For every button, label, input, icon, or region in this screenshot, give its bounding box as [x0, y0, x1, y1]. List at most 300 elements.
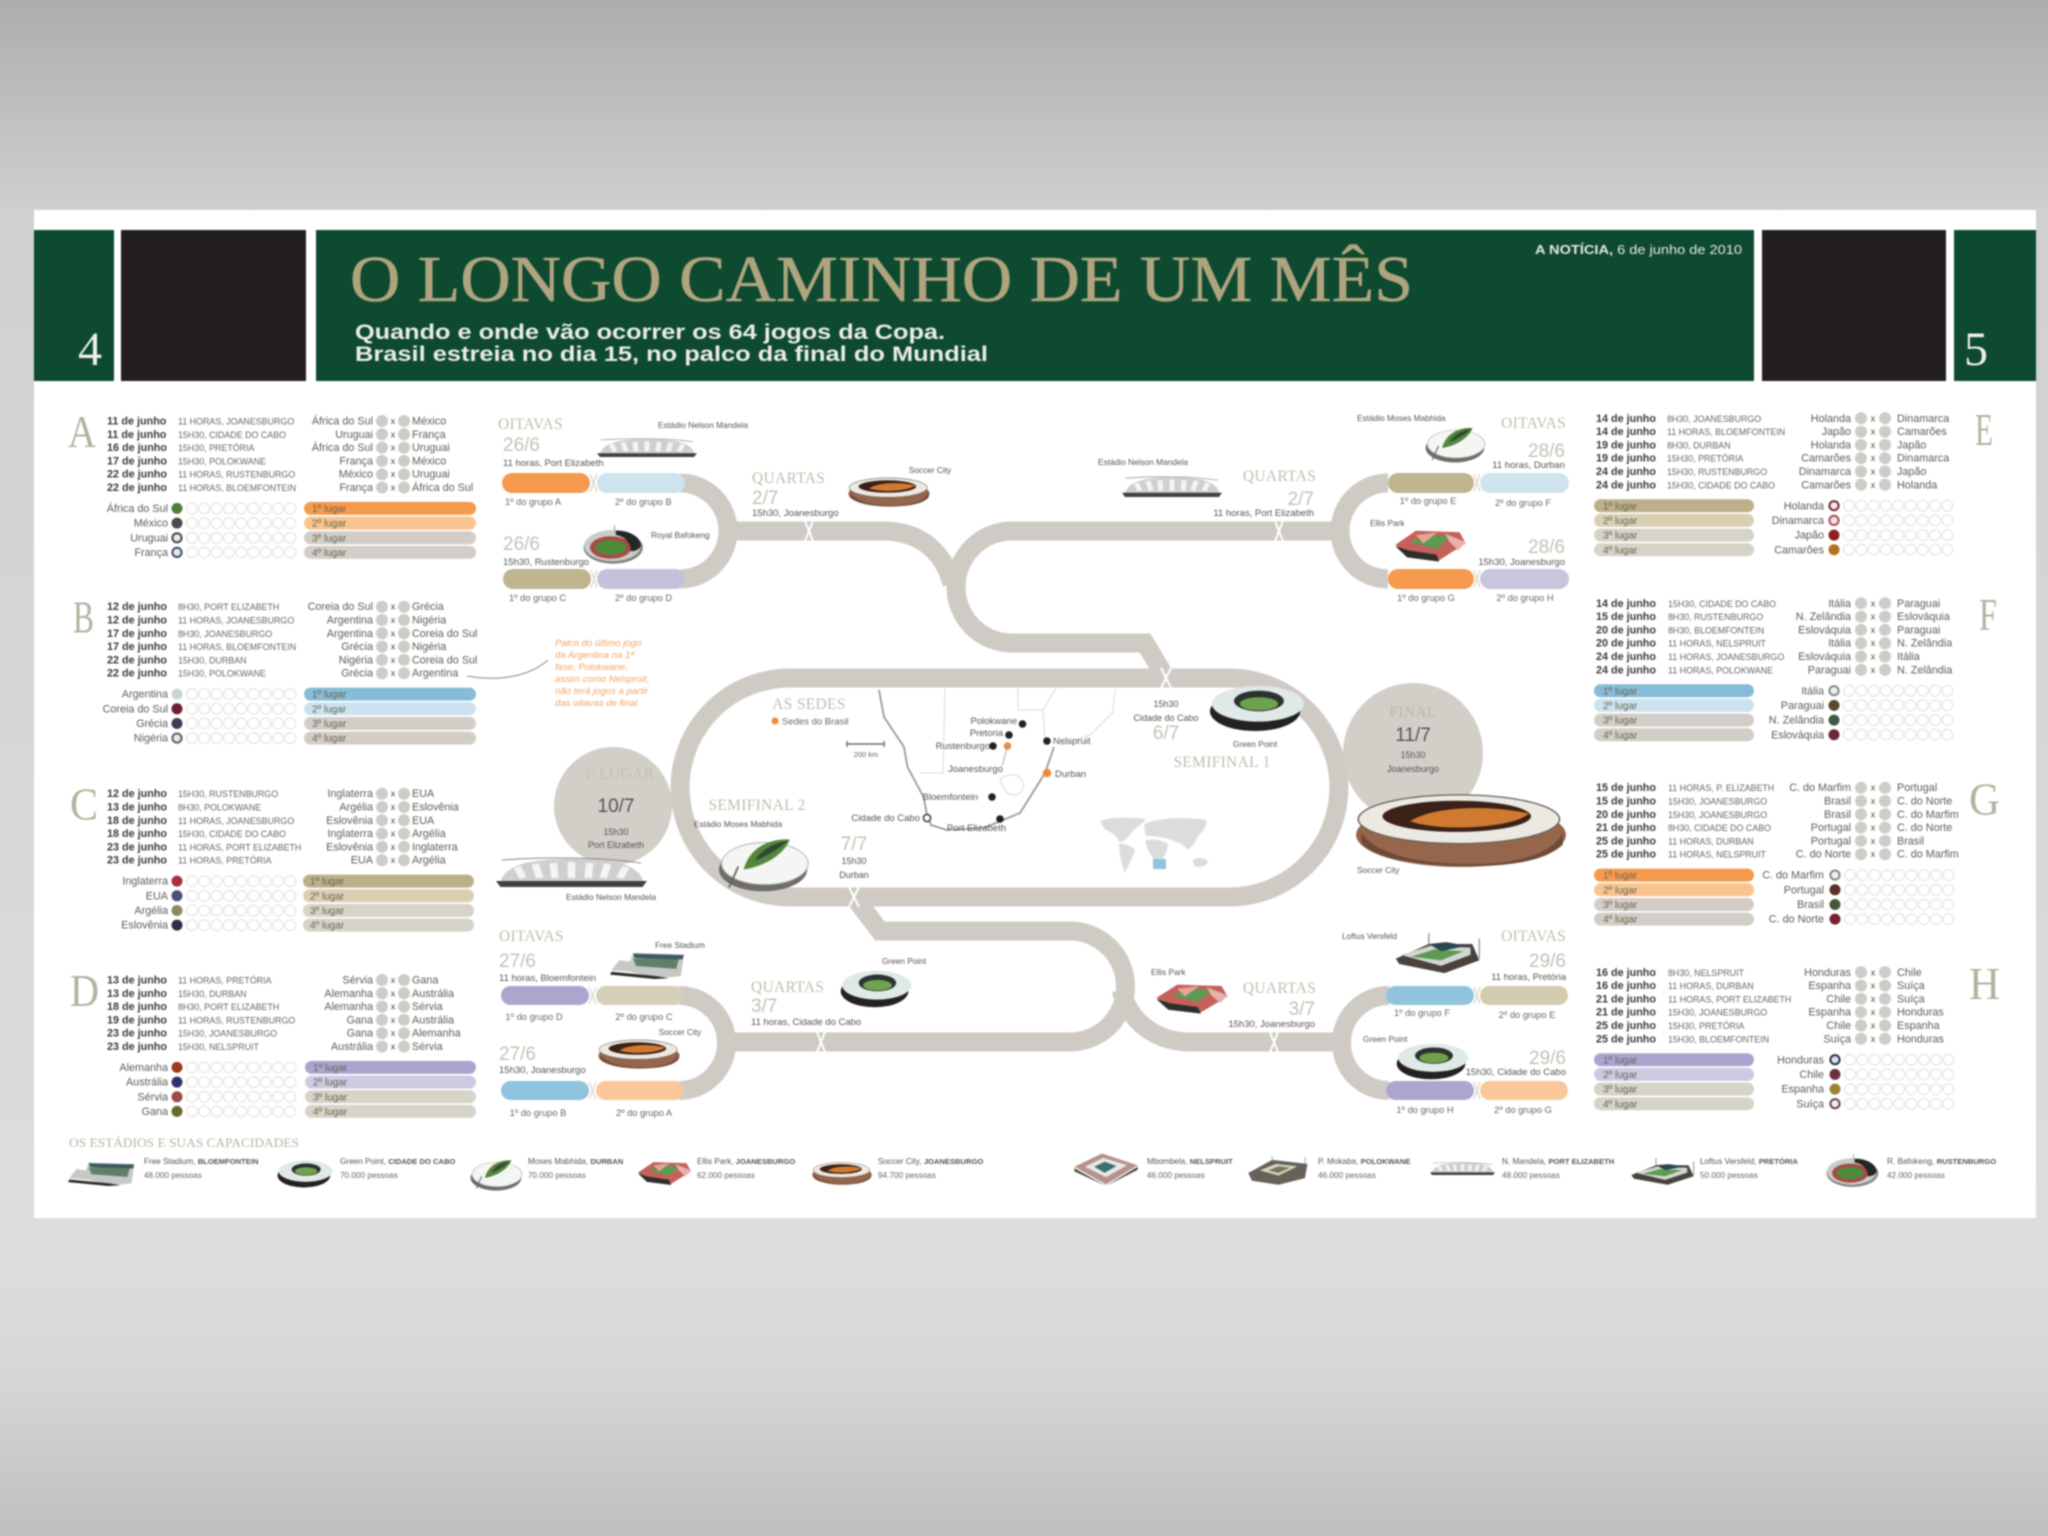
stadium: Royal Bafokeng: Royal Bafokeng: [651, 530, 710, 540]
Free Stadium: [68, 1157, 258, 1186]
fixtures B: 12 de junho: [107, 601, 167, 613]
fixtures G: C. do Norte: [1897, 796, 1952, 808]
stadium: Free State: [610, 940, 705, 979]
fixtures G: [1596, 782, 1959, 861]
fixtures H: 15H30, JOANESBURGO: [1668, 1008, 1767, 1018]
fixtures H: [1596, 966, 1944, 1045]
fixtures G: x: [1871, 836, 1876, 846]
fixtures A: África do Sul: [312, 414, 373, 428]
standings E: Japão: [1795, 530, 1824, 542]
world map: [1100, 818, 1208, 873]
callout note: [467, 638, 649, 709]
fixtures A: x: [391, 482, 396, 492]
group G: [1594, 773, 2000, 926]
fixtures G: 21 de junho: [1596, 822, 1656, 834]
fixtures A: México: [412, 416, 446, 428]
fixtures D: 15H30, NELSPRUIT: [178, 1042, 259, 1052]
match 2 info: 29/6: [1529, 1048, 1566, 1069]
quarter-final 2/7 left: QUARTAS: [752, 470, 825, 487]
quarter-final 2/7 left: [752, 465, 952, 519]
standings B: 2º lugar: [312, 704, 347, 715]
match 1 info: [499, 951, 673, 1022]
fixtures G: x: [1871, 809, 1876, 819]
fixtures H: x: [1871, 1007, 1876, 1017]
fixtures C: 15H30, RUSTENBURGO: [178, 789, 278, 799]
fixtures B: x: [391, 642, 396, 652]
fixtures H: Suíça: [1897, 993, 1925, 1005]
match 1 info: 1º do grupo F: [1394, 1008, 1450, 1018]
fixtures C: EUA: [412, 815, 435, 827]
quarter info: 15h30, Joanesburgo: [1228, 1019, 1315, 1030]
fixtures A: México: [339, 469, 373, 481]
fixtures E: 24 de junho: [1596, 479, 1656, 491]
round of 16: bottom left: [499, 928, 705, 1118]
scale bar: 200 km: [854, 750, 878, 759]
fixtures F: Paraguai: [1897, 598, 1940, 610]
fixtures E: 8H30, DURBAN: [1667, 440, 1731, 450]
fixtures A: 22 de junho: [107, 469, 167, 481]
fixtures G: 20 de junho: [1596, 809, 1656, 821]
fixtures A: 11 HORAS, JOANESBURGO: [178, 416, 294, 426]
fixtures G: 15 de junho: [1596, 796, 1656, 808]
fixtures E: Camarões: [1801, 479, 1852, 491]
stadium: Ellis Park: [1370, 518, 1466, 562]
fixtures E: x: [1871, 413, 1876, 423]
fixtures B: 22 de junho: [107, 654, 167, 666]
fixtures H: 21 de junho: [1596, 993, 1656, 1005]
fixtures F: 11 HORAS, NELSPRUIT: [1668, 639, 1767, 649]
fixtures H: 11 HORAS, PORT ELIZABETH: [1668, 994, 1791, 1004]
fixtures E: x: [1871, 453, 1876, 463]
match 1 info: 1º do grupo D: [505, 1012, 563, 1022]
fixtures C: x: [391, 802, 396, 812]
stadium: Nelson Mandela: Estádio Nelson Mandela: [1098, 457, 1188, 467]
heading oitavas: OITAVAS: [498, 416, 563, 433]
fixtures H: x: [1871, 981, 1876, 991]
stadium: Nelson Mandela: Estádio Nelson Mandela: [658, 420, 748, 430]
fixtures C: 8H30, POLOKWANE: [178, 803, 261, 813]
semifinal 2 date: 7/7: [841, 834, 867, 855]
stadium: Nelson Mandela third place: Estádio Nelson Mandela: [566, 892, 656, 902]
standings H: Espanha: [1781, 1084, 1824, 1096]
stadium: Ellis Park: Ellis Park: [1151, 967, 1186, 977]
Free Stadium: 48.000 pessoas: [144, 1171, 202, 1180]
standings A: 4º lugar: [312, 548, 347, 559]
fixtures F: x: [1871, 651, 1876, 661]
P. Mokaba: P. Mokaba, POLOKWANE: [1318, 1157, 1410, 1166]
fixtures B: Nigéria: [412, 615, 446, 627]
fixtures G: C. do Marfim: [1897, 809, 1959, 821]
stadium: Green Point: Green Point: [882, 956, 927, 966]
stadium: Moses Mabhida: Estádio Moses Mabhida: [1357, 413, 1446, 423]
cities: Polokwane: [971, 716, 1017, 727]
standings D: Alemanha: [119, 1062, 168, 1074]
fixtures G: C. do Marfim: [1789, 782, 1851, 794]
fixtures G: C. do Norte: [1796, 849, 1851, 861]
stadium: Nelson Mandela: [597, 420, 748, 457]
fixtures G: C. do Marfim: [1897, 849, 1959, 861]
N. Mandela: N. Mandela, PORT ELIZABETH: [1502, 1157, 1614, 1166]
fixtures D: 13 de junho: [107, 974, 167, 986]
letter E: E: [1975, 404, 1993, 455]
fixtures D: 19 de junho: [107, 1014, 167, 1026]
fixtures D: 11 HORAS, RUSTENBURGO: [178, 1015, 295, 1025]
fixtures A: x: [391, 429, 396, 439]
semifinal 1 date: 6/7: [1153, 723, 1179, 744]
round of 16: top right: [1357, 413, 1569, 603]
quarter info: 11 horas, Port Elizabeth: [1213, 508, 1314, 519]
fixtures H: Honduras: [1897, 1033, 1944, 1045]
standings E: 4º lugar: [1603, 545, 1638, 556]
fixtures F: 15 de junho: [1596, 611, 1656, 623]
fixtures G: 15H30, JOANESBURGO: [1668, 797, 1767, 807]
coastline: [879, 690, 1054, 830]
stadium: Loftus Versfeld: Loftus Versfeld: [1342, 931, 1397, 941]
callout text: das oitavas de final: [555, 698, 638, 709]
heading oitavas: OITAVAS: [1501, 415, 1566, 432]
fixtures G: 25 de junho: [1596, 849, 1656, 861]
fixtures D: x: [391, 1015, 396, 1025]
quarter info: 3/7: [751, 996, 777, 1017]
South Africa marker: [1153, 859, 1166, 869]
cities: Durban: [1055, 769, 1086, 780]
Moses Mabhida: Moses Mabhida, DURBAN: [528, 1157, 623, 1166]
standings F: [1594, 684, 1953, 741]
fixtures F: 20 de junho: [1596, 624, 1656, 636]
match 1 info: 2º do grupo B: [615, 497, 672, 507]
Green Point: Green Point, CIDADE DO CABO: [340, 1157, 455, 1166]
subtitle: Quando e onde vão ocorrer os 64 jogos da Copa.: [355, 321, 945, 344]
black ad block left: [121, 230, 306, 381]
page number block left: 4: [78, 323, 102, 376]
match 2 info: 15h30, Joanesburgo: [1478, 557, 1565, 568]
standings C: Argélia: [134, 905, 168, 917]
page number block right: [1954, 230, 2036, 381]
match 1 info: 1º do grupo A: [505, 497, 562, 507]
quarter info: [1228, 999, 1315, 1030]
fixtures H: 8H30, NELSPRUIT: [1668, 968, 1745, 978]
standings A: Uruguai: [130, 532, 168, 544]
fixtures F: 11 HORAS, JOANESBURGO: [1668, 652, 1784, 662]
fixtures A: 11 HORAS, BLOEMFONTEIN: [178, 483, 296, 493]
match 2 info: [499, 1044, 673, 1118]
fixtures C: Inglaterra: [412, 841, 458, 853]
stadium capacities strip: [68, 1136, 1996, 1191]
semifinal 2 date: 15h30: [841, 856, 867, 866]
fixtures F: Paraguai: [1808, 664, 1851, 676]
fixtures E: Camarões: [1801, 453, 1852, 465]
fixtures A: 17 de junho: [107, 455, 167, 467]
letter A: A: [68, 406, 96, 457]
fixtures A: França: [412, 429, 446, 441]
fixtures G: 11 HORAS, NELSPRUIT: [1668, 850, 1767, 860]
standings H: 1º lugar: [1603, 1055, 1638, 1066]
fixtures C: Eslovênia: [326, 841, 373, 853]
heading oitavas: OITAVAS: [499, 928, 564, 945]
semifinal 2 date: [839, 834, 869, 880]
map legend: Sedes do Brasil: [782, 716, 849, 728]
standings D: 2º lugar: [313, 1078, 348, 1089]
R. Bafokeng: R. Bafokeng, RUSTENBURGO: [1887, 1157, 1996, 1166]
fixtures D: Austrália: [412, 1014, 454, 1026]
match 2 info: 28/6: [1528, 537, 1565, 558]
fixtures B: 15H30, DURBAN: [178, 655, 247, 665]
match 2 info: 1º do grupo B: [510, 1108, 566, 1118]
fixtures B: Argentina: [327, 615, 373, 627]
stadium: Soccer City: [598, 1027, 702, 1069]
fixtures D: x: [391, 988, 396, 998]
heading oitavas: OITAVAS: [1501, 928, 1566, 945]
fixtures A: [107, 414, 473, 494]
standings E: [1594, 499, 1953, 556]
fixtures D: 15H30, JOANESBURGO: [178, 1029, 277, 1039]
fixtures F: Itália: [1897, 651, 1920, 663]
subtitle: [355, 321, 988, 366]
R. Bafokeng: [1827, 1154, 1996, 1187]
stadium: Loftus Versfeld: [1342, 931, 1479, 973]
match 1 info: 28/6: [1528, 441, 1565, 462]
quarter-final 3/7 right: QUARTAS: [1243, 980, 1316, 997]
fixtures D: 18 de junho: [107, 1001, 167, 1013]
standings H: [1594, 1053, 1954, 1110]
standings H: Suíça: [1796, 1098, 1824, 1110]
match 2 info: 1º do grupo C: [509, 593, 566, 603]
standings D: [119, 1061, 476, 1118]
bars top right: [1388, 473, 1569, 589]
fixtures B: 11 HORAS, BLOEMFONTEIN: [178, 642, 296, 652]
fixtures B: 15H30, POLOKWANE: [178, 669, 266, 679]
standings B: Argentina: [122, 689, 168, 701]
stadium: Soccer City: [848, 465, 952, 507]
group E: [1594, 404, 1993, 556]
Loftus Versfeld: 50.000 pessoas: [1700, 1171, 1758, 1180]
fixtures G: x: [1871, 823, 1876, 833]
semifinal 2 date: Durban: [839, 870, 869, 880]
bracket tracks: [679, 483, 1389, 1090]
fixtures F: Paraguai: [1897, 624, 1940, 636]
Mbombela: 46.000 pessoas: [1147, 1171, 1205, 1180]
standings D: Sérvia: [137, 1091, 168, 1103]
fixtures D: 13 de junho: [107, 988, 167, 1000]
fixtures H: 16 de junho: [1596, 967, 1656, 979]
P. Mokaba: 46.000 pessoas: [1318, 1171, 1376, 1180]
fixtures A: 22 de junho: [107, 482, 167, 494]
semifinal 1: [1133, 686, 1304, 771]
group B: [73, 592, 477, 745]
title: O LONGO CAMINHO DE UM MÊS: [350, 243, 1413, 316]
fixtures A: 11 de junho: [107, 429, 167, 441]
fixtures C: 23 de junho: [107, 855, 167, 867]
standings G: 3º lugar: [1603, 900, 1638, 911]
standings C: Eslovênia: [121, 920, 168, 932]
cities: Cidade do Cabo: [851, 813, 920, 824]
fixtures C: Eslovênia: [326, 815, 373, 827]
standings G: Portugal: [1784, 884, 1824, 896]
standings E: Dinamarca: [1772, 515, 1824, 527]
fixtures E: x: [1871, 427, 1876, 437]
fixtures D: 15H30, DURBAN: [178, 989, 247, 999]
fixtures B: 11 HORAS, JOANESBURGO: [178, 616, 294, 626]
fixtures B: x: [391, 655, 396, 665]
stadium: Moses Mabhida: Estádio Moses Mabhida: [694, 819, 783, 829]
strip heading: OS ESTÁDIOS E SUAS CAPACIDADES: [69, 1136, 299, 1150]
final date: 11/7: [1395, 725, 1431, 746]
stadium: Soccer City: Soccer City: [909, 465, 952, 475]
cities: [851, 716, 1091, 834]
fixtures D: 8H30, PORT ELIZABETH: [178, 1002, 279, 1012]
match 2 info: 15h30, Rustenburgo: [503, 557, 589, 568]
match 2 info: 2º do grupo D: [615, 593, 672, 603]
fixtures E: x: [1871, 466, 1876, 476]
fixtures G: x: [1871, 783, 1876, 793]
standings C: Inglaterra: [122, 876, 168, 888]
quarter info: [1213, 489, 1314, 519]
fixtures G: 11 HORAS, P. ELIZABETH: [1668, 783, 1774, 793]
fixtures A: 15H30, CIDADE DO CABO: [178, 430, 286, 440]
fixtures C: EUA: [351, 855, 374, 867]
standings C: EUA: [146, 890, 169, 902]
fixtures C: 23 de junho: [107, 841, 167, 853]
final venue: [1387, 750, 1439, 774]
fixtures E: Dinamarca: [1799, 466, 1851, 478]
fixtures C: 11 HORAS, PORT ELIZABETH: [178, 842, 301, 852]
fixtures H: x: [1871, 994, 1876, 1004]
stadium: Moses Mabhida: [694, 819, 808, 891]
callout text: Palco do último jogo: [555, 638, 642, 649]
match 2 info: 2º do grupo A: [616, 1108, 673, 1118]
match 1 info: [1400, 441, 1565, 508]
letter G: G: [1969, 773, 2000, 824]
fixtures G: x: [1871, 849, 1876, 859]
fixtures C: x: [391, 855, 396, 865]
match 2 info: 1º do grupo H: [1396, 1105, 1454, 1115]
stadium: Ellis Park: Ellis Park: [1370, 518, 1405, 528]
final heading: FINAL: [1389, 704, 1437, 721]
final venue: Joanesburgo: [1387, 764, 1439, 774]
stadium: Green Point: [841, 956, 927, 1007]
standings A: México: [134, 518, 168, 530]
standings E: 1º lugar: [1603, 501, 1638, 512]
fixtures C: 13 de junho: [107, 802, 167, 814]
fixtures A: França: [339, 482, 373, 494]
match 2 info: [1396, 1048, 1566, 1115]
fixtures F: x: [1871, 665, 1876, 675]
fixtures E: 19 de junho: [1596, 439, 1656, 451]
fixtures B: Grécia: [341, 641, 373, 653]
fixtures F: 11 HORAS, POLOKWANE: [1668, 665, 1773, 675]
fixtures C: 18 de junho: [107, 815, 167, 827]
fixtures F: 8H30, RUSTENBURGO: [1668, 612, 1763, 622]
standings E: Holanda: [1784, 500, 1824, 512]
fixtures G: Brasil: [1824, 809, 1851, 821]
fixtures C: EUA: [412, 788, 435, 800]
fixtures H: 25 de junho: [1596, 1020, 1656, 1032]
fixtures E: Holanda: [1811, 413, 1851, 425]
fixtures H: Espanha: [1808, 1007, 1851, 1019]
fixtures B: Grécia: [341, 668, 373, 680]
third-place date: 10/7: [598, 796, 634, 817]
cities: Pretoria: [970, 728, 1004, 739]
final venue: 15h30: [1400, 750, 1426, 760]
fixtures G: 11 HORAS, DURBAN: [1668, 836, 1754, 846]
Free Stadium: Free Stadium, BLOEMFONTEIN: [144, 1157, 258, 1166]
fixtures F: x: [1871, 612, 1876, 622]
fixtures E: 11 HORAS, BLOEMFONTEIN: [1667, 427, 1785, 437]
match 1 info: 27/6: [499, 951, 536, 972]
bars top left: [502, 473, 685, 589]
standings H: Honduras: [1777, 1054, 1825, 1066]
standings B: Grécia: [136, 718, 168, 730]
callout text: [555, 638, 649, 709]
fixtures H: 15H30, PRETÓRIA: [1668, 1021, 1745, 1031]
fixtures D: Sérvia: [412, 1001, 443, 1013]
fixtures D: x: [391, 1002, 396, 1012]
Loftus Versfeld: Loftus Versfeld, PRETÓRIA: [1700, 1157, 1798, 1166]
page number block left: [34, 230, 114, 381]
match 2 info: 27/6: [499, 1044, 536, 1065]
fixtures H: x: [1871, 1020, 1876, 1030]
quarter info: 2/7: [752, 488, 778, 509]
fixtures D: 23 de junho: [107, 1028, 167, 1040]
standings C: 1º lugar: [310, 877, 345, 888]
match 1 info: 26/6: [503, 435, 540, 456]
quarter-final 2/7 right: QUARTAS: [1243, 468, 1316, 485]
cities: Bloemfontein: [923, 792, 978, 803]
standings H: 2º lugar: [1603, 1070, 1638, 1081]
match 1 info: 2º do grupo C: [615, 1012, 673, 1022]
standings E: 2º lugar: [1603, 516, 1638, 527]
Ellis Park: [638, 1157, 795, 1185]
quarter info: 15h30, Joanesburgo: [752, 508, 839, 519]
bars bottom right: [1386, 986, 1568, 1100]
fixtures B: x: [391, 668, 396, 678]
quarter info: 3/7: [1289, 999, 1315, 1020]
stadium: Green Point: Green Point: [1233, 739, 1278, 749]
match 1 info: 11 horas, Pretória: [1491, 972, 1567, 983]
fixtures F: x: [1871, 638, 1876, 648]
fixtures A: 16 de junho: [107, 442, 167, 454]
fixtures A: França: [339, 455, 373, 467]
standings F: 3º lugar: [1603, 716, 1638, 727]
fixtures B: Nigéria: [412, 641, 446, 653]
letter C: C: [70, 779, 98, 830]
fixtures A: África do Sul: [312, 441, 373, 454]
fixtures B: Argentina: [327, 628, 373, 640]
cities: Rustenburgo: [936, 741, 990, 752]
fixtures H: 16 de junho: [1596, 980, 1656, 992]
fixtures H: Chile: [1826, 1020, 1851, 1032]
fixtures G: Portugal: [1897, 782, 1937, 794]
standings D: Austrália: [126, 1077, 168, 1089]
fixtures B: 8H30, PORT ELIZABETH: [178, 602, 279, 612]
fixtures C: x: [391, 829, 396, 839]
fixtures G: 15H30, JOANESBURGO: [1668, 810, 1767, 820]
fixtures E: 24 de junho: [1596, 466, 1656, 478]
fixtures E: Japão: [1822, 426, 1851, 438]
fixtures B: Coreia do Sul: [308, 601, 373, 613]
fixtures B: Coreia do Sul: [412, 628, 477, 640]
stadium: Green Point: [1210, 686, 1304, 749]
standings B: Nigéria: [134, 733, 168, 745]
fixtures C: Eslovênia: [412, 802, 459, 814]
fixtures C: Argélia: [339, 802, 373, 814]
round of 16: bottom right: [1342, 928, 1568, 1115]
fixtures D: Alemanha: [324, 988, 373, 1000]
subtitle: Brasil estreia no dia 15, no palco da final do Mundial: [355, 343, 988, 366]
fixtures H: x: [1871, 1034, 1876, 1044]
semifinal 1: SEMIFINAL 1: [1173, 754, 1271, 771]
quarter info: [752, 488, 839, 519]
